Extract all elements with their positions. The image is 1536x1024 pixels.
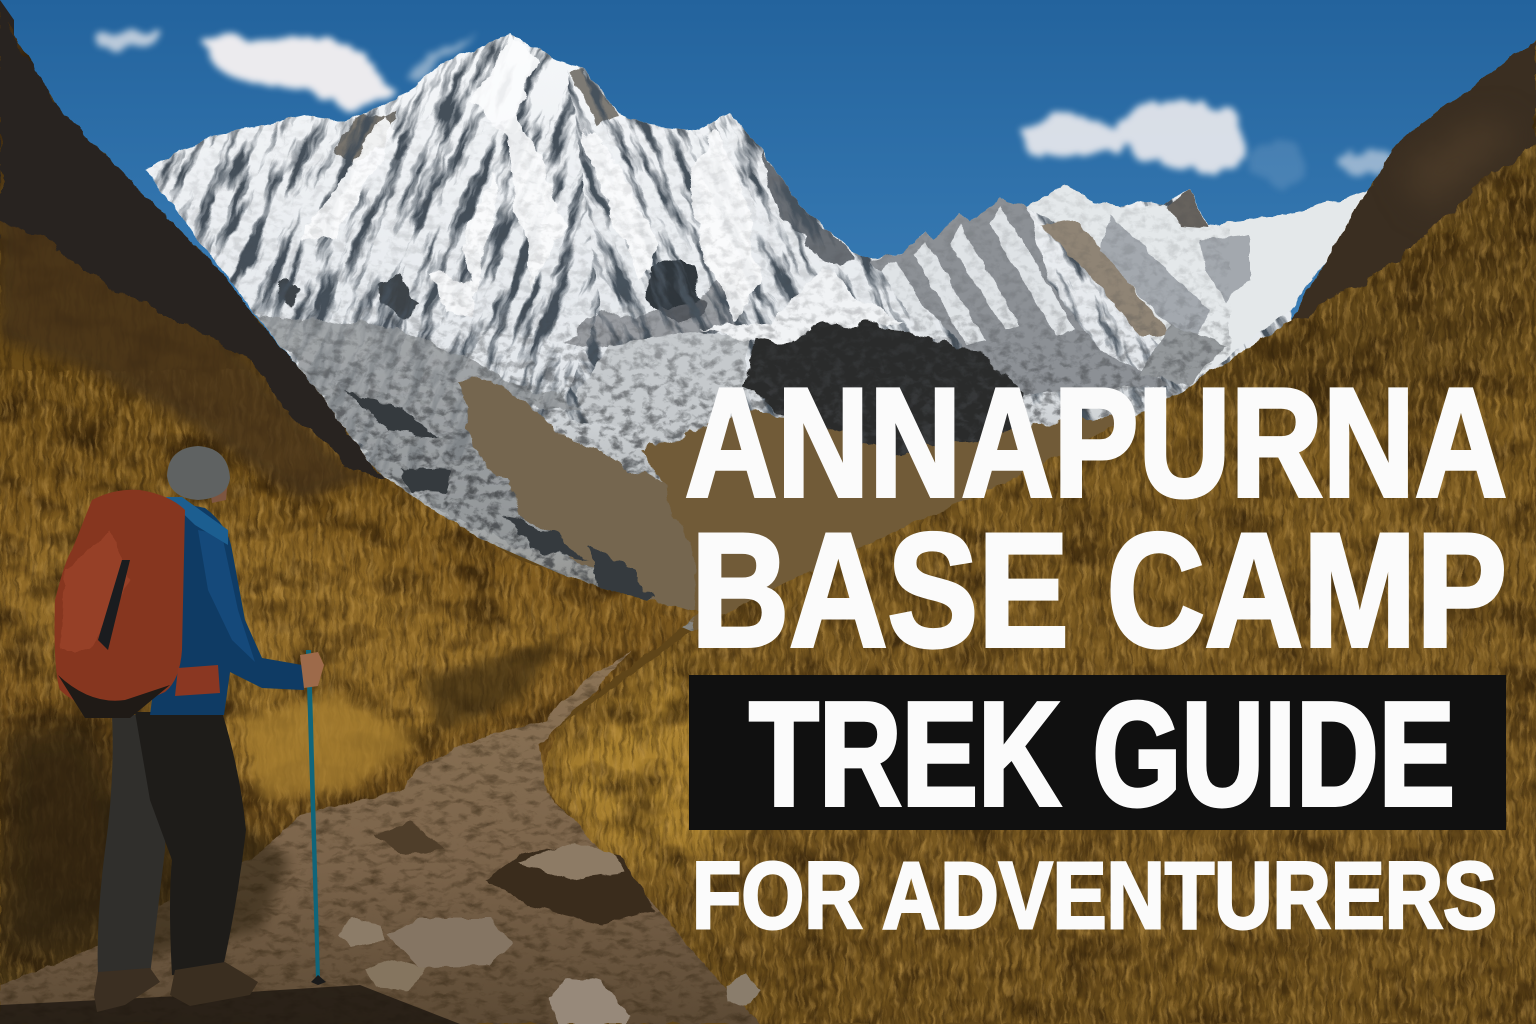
cloud wisp: right	[1331, 149, 1399, 175]
pebble left	[338, 917, 385, 946]
small rock cluster	[375, 822, 445, 855]
snowy right peak	[1028, 184, 1378, 385]
back boot	[94, 968, 160, 1012]
collar	[166, 497, 228, 545]
shaded grass below rock	[0, 200, 380, 500]
grey summit rock right	[1168, 189, 1208, 228]
slope base	[500, 30, 1536, 1024]
hip belt	[175, 665, 220, 696]
brown moraine	[458, 376, 696, 622]
hat	[167, 446, 230, 500]
cloud wisp: left of summit	[408, 35, 478, 86]
front leg	[135, 712, 246, 975]
large rock shadow	[485, 845, 655, 925]
pebble right	[726, 975, 762, 1006]
fine light strands	[0, 430, 780, 1024]
streak texture left of summit	[154, 33, 600, 476]
snow bands on ridge	[880, 205, 1075, 345]
mountain massif	[145, 33, 1368, 632]
cloud: right large	[1020, 101, 1245, 172]
backpack highlight	[60, 530, 130, 650]
tan summit rock	[332, 108, 395, 162]
valley mid brown	[641, 408, 1136, 630]
back leg	[98, 715, 170, 975]
dark cliff top right	[1285, 35, 1536, 325]
fine light strands	[500, 120, 1536, 1024]
tan rock on right peak	[1040, 220, 1170, 335]
foreground shadow	[0, 985, 460, 1024]
flat rock	[388, 918, 512, 968]
trail texture	[0, 640, 770, 1024]
snow highlights	[300, 33, 762, 320]
shaded rock shapes	[280, 68, 860, 350]
speckle over mountain	[130, 120, 1230, 630]
trail rocks	[338, 822, 762, 1024]
bright tuft	[240, 695, 420, 800]
lower rock	[548, 978, 630, 1024]
backpack base	[58, 675, 170, 718]
fine dark strands	[0, 200, 780, 1024]
upper-ridge snow cap	[700, 266, 905, 345]
dark buttress	[748, 322, 1025, 470]
clouds	[91, 28, 1399, 185]
ground shadow by leg	[100, 800, 290, 960]
dark strip at left edge	[0, 0, 14, 240]
front boot	[170, 962, 258, 1006]
face	[210, 478, 228, 503]
sky	[0, 0, 1536, 520]
shadowed band under cliff	[1180, 150, 1536, 430]
trail surface	[0, 640, 770, 1024]
backpack body	[55, 490, 185, 712]
dark lower rocks	[345, 390, 655, 600]
glacier	[576, 332, 750, 428]
left hillside	[0, 0, 780, 1024]
hand	[300, 652, 324, 688]
sunlit band	[0, 500, 620, 790]
sunlit grass near trail	[540, 650, 760, 860]
dark patches	[500, 120, 1536, 1024]
grey faces	[646, 262, 702, 320]
streak texture right of summit	[563, 66, 1364, 424]
grey flutes right peak	[1100, 215, 1250, 350]
jacket body	[150, 500, 304, 715]
fine dark strands	[500, 120, 1536, 1024]
dirt trail	[0, 640, 770, 1024]
jacket highlight	[198, 530, 255, 662]
grey fluted ridge	[870, 198, 1170, 395]
shade strip by trail	[420, 640, 560, 730]
grey moraine left	[255, 310, 600, 560]
right hillside	[500, 30, 1536, 1024]
pole tip	[311, 975, 326, 985]
cliff lit face	[1400, 120, 1520, 210]
pebble lower	[365, 958, 425, 990]
hillside base	[0, 0, 780, 1024]
cloud wisp: centre right	[1250, 145, 1310, 185]
large rock highlight	[518, 843, 625, 880]
dark patches	[0, 100, 780, 1024]
snow base	[145, 33, 1368, 632]
backpack strap	[98, 560, 130, 650]
cloud: behind summit	[203, 37, 395, 112]
trekking pole	[306, 650, 320, 980]
banner background	[689, 675, 1506, 830]
hiker	[55, 446, 326, 1012]
right ridge	[870, 184, 1378, 395]
cloud: top left small	[91, 28, 159, 48]
dark foreground tuft	[0, 720, 160, 960]
dark rocky upper slope	[0, 5, 385, 480]
black banner	[689, 672, 1506, 837]
